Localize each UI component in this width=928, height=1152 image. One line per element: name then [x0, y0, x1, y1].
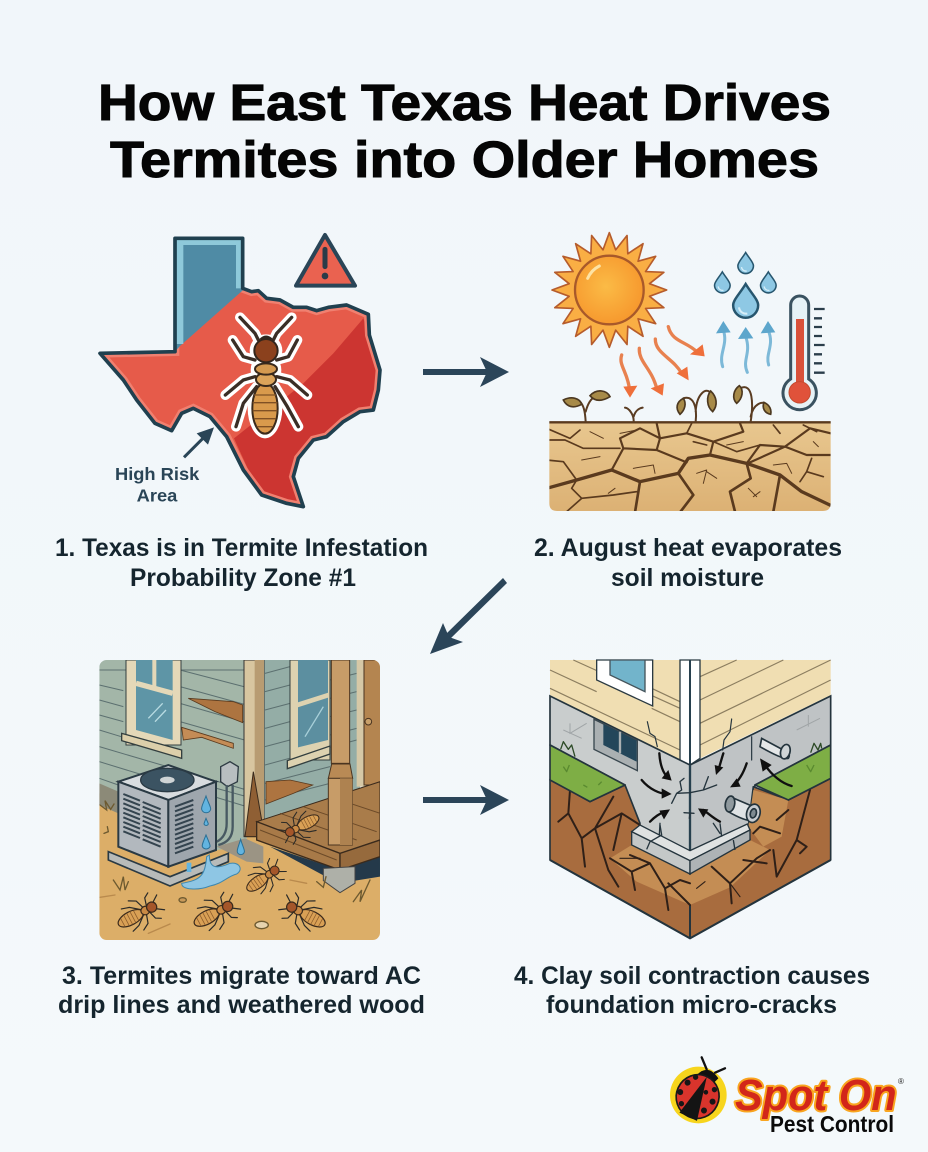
arrow: step 2 to 3 [430, 578, 507, 654]
wall siding [99, 660, 360, 850]
porch post [328, 660, 353, 845]
label: high risk area: Area [137, 485, 178, 505]
wilting sprouts [563, 386, 771, 422]
caption 1: Probability Zone #1 [130, 564, 356, 592]
logo: Spot On Pest Control [669, 1057, 904, 1137]
panel 2: evaporation [547, 233, 833, 512]
caption 4 [514, 962, 870, 1019]
caption 2: soil moisture [611, 564, 764, 592]
caption 1 [55, 534, 428, 592]
label: high risk area: High Risk [115, 464, 200, 484]
water droplets [715, 253, 776, 318]
AC unit [108, 765, 228, 886]
icon: warning triangle [296, 235, 355, 286]
map of Texas [100, 237, 383, 510]
caption 4: foundation micro-cracks [546, 991, 837, 1019]
soil block [550, 778, 831, 938]
sandy ground [99, 793, 380, 940]
panel 3: termites migrating [99, 660, 381, 940]
corner trim [680, 660, 700, 765]
door [357, 660, 381, 787]
cracked soil [547, 422, 833, 512]
pressure arrows [642, 753, 792, 822]
electrical box and conduit [217, 762, 238, 845]
icon: termite [225, 317, 307, 438]
label: high risk area [115, 464, 200, 505]
basement window [594, 719, 637, 771]
upper window [597, 660, 653, 706]
siding walls [550, 660, 831, 762]
icon: thermometer [783, 296, 825, 410]
pipes [724, 738, 792, 824]
wordmark: ® [898, 1077, 904, 1086]
left window [122, 660, 182, 758]
arrow: step 1 to 2 [423, 357, 509, 387]
rising vapour arrows [716, 321, 775, 372]
foundation cracks [647, 719, 752, 835]
porch deck [257, 782, 380, 893]
caption 3: 3. Termites migrate toward AC [62, 962, 421, 990]
panel 1: Texas risk map [100, 235, 383, 510]
caption 2: 2. August heat evaporates [534, 534, 842, 562]
wordmark: Spot On [735, 1072, 897, 1120]
grass [550, 742, 831, 802]
title: Termites into Older Homes [110, 131, 819, 188]
wordmark: Pest Control [770, 1111, 894, 1137]
corner post [217, 660, 264, 863]
caption 4: 4. Clay soil contraction causes [514, 962, 870, 990]
caption 2 [534, 534, 842, 592]
icon: ladybug [669, 1057, 727, 1126]
panel 4: foundation cross-section [550, 660, 831, 938]
damaged siding [182, 698, 313, 804]
heat arrows [621, 327, 705, 398]
termites [111, 804, 333, 939]
footing [632, 823, 750, 874]
wordmark: Spot On [735, 1072, 897, 1120]
icon: sun [552, 233, 667, 347]
caption 1: 1. Texas is in Termite Infestation [55, 534, 428, 562]
title: How East Texas Heat Drives [98, 74, 831, 131]
caption 3 [58, 962, 425, 1019]
title [98, 74, 831, 188]
right window [287, 660, 330, 769]
concrete foundation [550, 696, 831, 852]
ground details [100, 801, 370, 933]
caption 3: drip lines and weathered wood [58, 991, 425, 1019]
water drips and puddle [182, 796, 244, 889]
arrow: high risk pointer [184, 427, 214, 457]
arrow: step 3 to 4 [423, 785, 509, 815]
